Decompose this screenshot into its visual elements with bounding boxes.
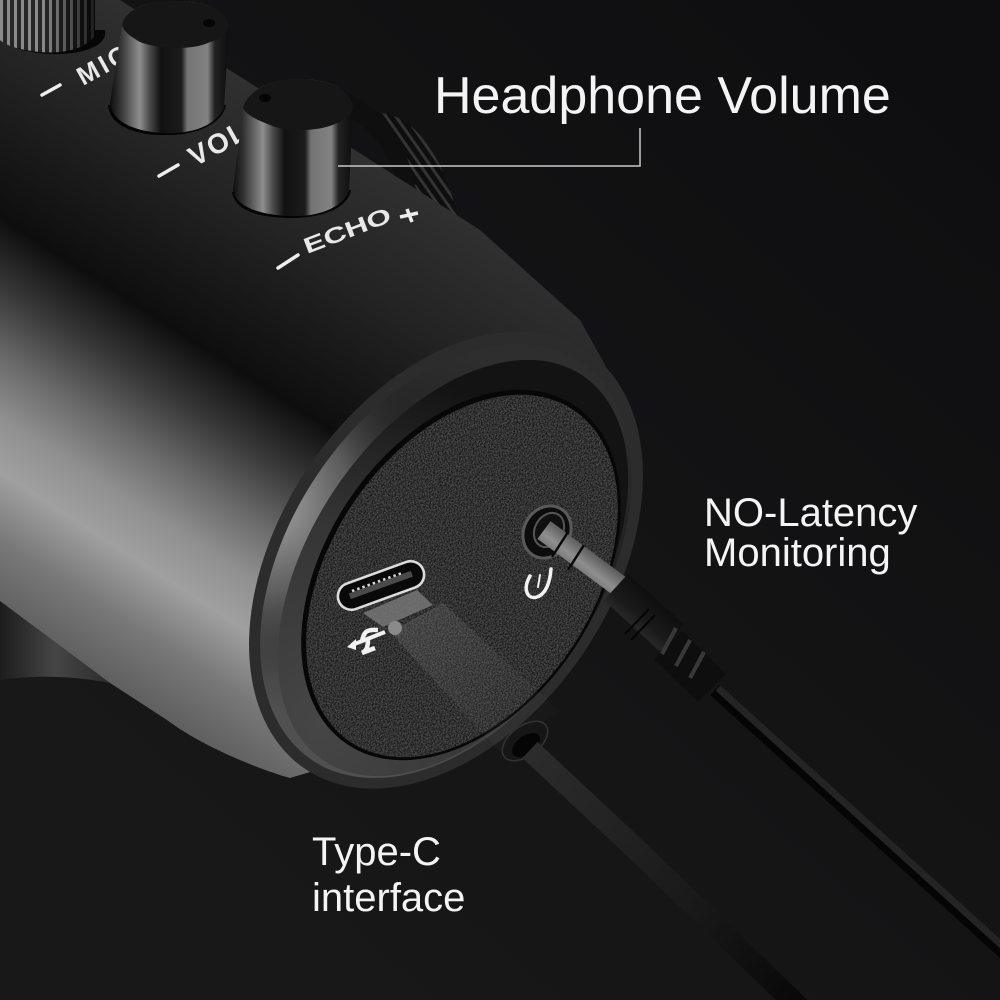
knob: headphone volume — [232, 79, 353, 218]
textured plate — [242, 337, 682, 815]
icon: headset symbol — [526, 569, 551, 598]
usb-c port — [334, 557, 428, 614]
text: no-latency monitoring: Monitoring — [704, 531, 891, 575]
panel label: mic — [42, 38, 135, 95]
heading: headphone volume: Headphone Volume — [434, 67, 891, 125]
stand neck — [0, 601, 110, 683]
icon: usb symbol — [347, 630, 385, 653]
text: type-c interface: Type-C — [312, 830, 441, 874]
microphone body — [0, 0, 623, 778]
leader line — [338, 128, 640, 166]
text: no-latency monitoring — [704, 491, 917, 575]
knob: top left wheel — [0, 0, 105, 54]
knob: mic gain — [108, 1, 229, 135]
end ring — [167, 258, 725, 862]
text: type-c interface — [312, 830, 465, 920]
panel label: mic: MIC — [71, 38, 135, 91]
cable: type-c with strain relief — [495, 713, 800, 1000]
text: no-latency monitoring: NO-Latency — [704, 491, 917, 535]
plate reflection — [390, 603, 560, 752]
cable: headphone jack — [715, 688, 1000, 954]
text: type-c interface: interface — [312, 876, 465, 920]
usb dot — [388, 621, 402, 635]
echo wheel behind the body — [345, 92, 458, 218]
panel label: echo — [278, 202, 418, 268]
panel label: vol: VOL — [183, 114, 254, 172]
reflection under port — [363, 590, 433, 627]
panel label: echo: ECHO — [300, 202, 395, 259]
headphone jack socket and plug — [514, 497, 712, 688]
